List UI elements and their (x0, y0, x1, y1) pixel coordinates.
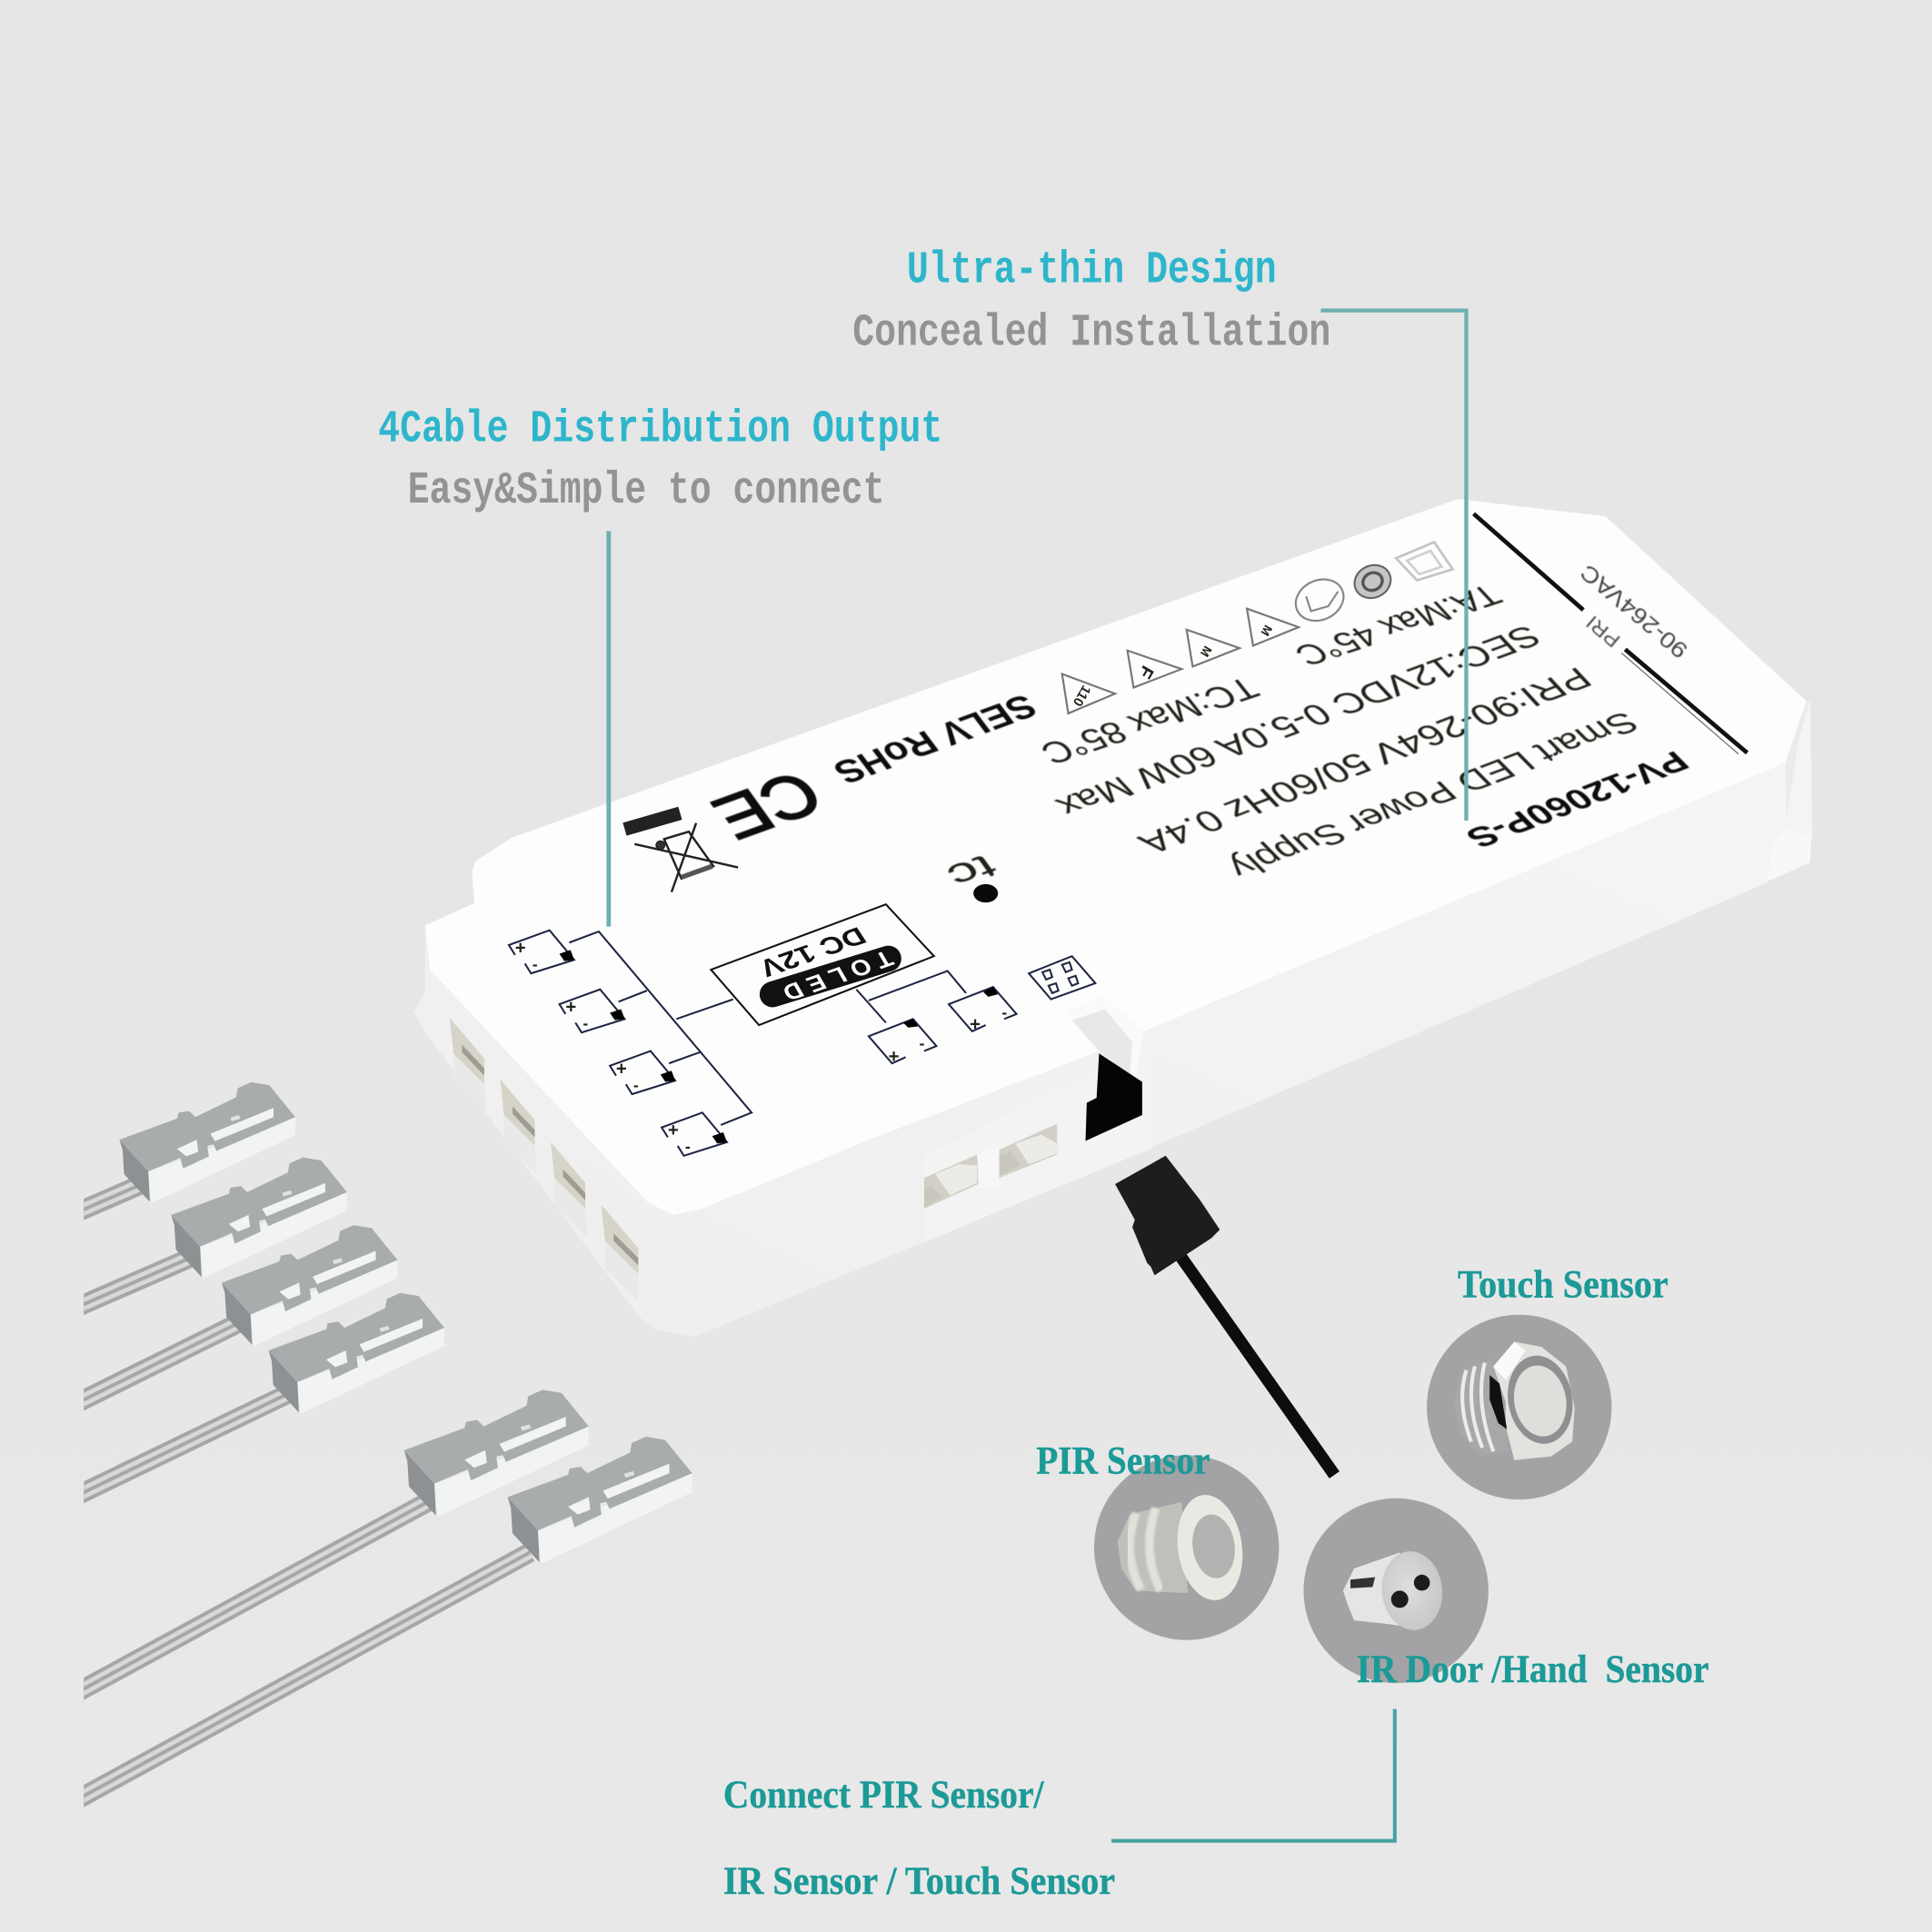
cable 5 (74, 1389, 589, 1694)
product name: Smart LED Power Supply (1220, 705, 1647, 884)
safety symbols: 110 (1070, 682, 1093, 709)
wiring schematic: - (633, 1076, 639, 1094)
wiring schematic: - (919, 1034, 924, 1052)
touch sensor icon (1427, 1315, 1611, 1499)
disposal icon (624, 813, 738, 892)
power supply device (414, 499, 1812, 1337)
ambient temperature: TA:Max 45°C (1287, 578, 1509, 672)
wiring schematic: - (533, 955, 538, 973)
safety symbols: F (1134, 662, 1157, 682)
wiring schematic: + (515, 938, 526, 958)
cable 3 (74, 1225, 397, 1405)
case temperature: TC:Max 85°C (1032, 670, 1266, 770)
pri label: PRI (1581, 611, 1625, 652)
safety symbols: M (1198, 643, 1214, 659)
device top face (425, 499, 1807, 1215)
cable 4 (74, 1293, 444, 1497)
heading: 4Cable Distribution Output (378, 403, 942, 455)
wiring schematic: + (889, 1047, 900, 1067)
device side faces (414, 701, 1812, 1337)
input voltage: 90-264VAC (1576, 559, 1693, 662)
caption: connect sensors: Connect PIR Sensor/ (723, 1773, 1044, 1817)
leader line: ultra-thin (1320, 311, 1466, 821)
secondary rating: SEC:12VDC 0-5.0A 60W Max (1048, 619, 1549, 822)
wiring schematic: - (1001, 1003, 1007, 1021)
end lines (1474, 513, 1748, 754)
safety symbols (1062, 543, 1453, 713)
subheading: Easy&Simple to connect (408, 465, 885, 517)
CE mark: CE (700, 758, 835, 851)
leader line: sensors (1111, 1709, 1395, 1841)
primary rating: PRI:90-264V 50/60Hz 0.4A (1130, 661, 1598, 860)
front sockets (923, 1045, 1152, 1242)
caption: connect sensors: IR Sensor / Touch Sensor (723, 1859, 1115, 1903)
wiring schematic: + (970, 1015, 981, 1035)
leader line: cable output (607, 531, 611, 927)
PIR sensor icon (1094, 1455, 1279, 1640)
safety symbols: M (1258, 622, 1275, 638)
sensor port slot (1064, 996, 1143, 1141)
wiring schematic: + (668, 1120, 679, 1140)
label: PIR sensor: PIR Sensor (1036, 1439, 1210, 1483)
tc dot (973, 884, 998, 902)
wiring schematic: + (565, 998, 576, 1018)
label: touch sensor: Touch Sensor (1458, 1263, 1668, 1307)
caption: connect sensors (723, 1773, 1115, 1903)
certification text: SELV RoHS (826, 687, 1044, 791)
callout: ultra-thin design (852, 244, 1330, 360)
heading: Ultra-thin Design (907, 244, 1277, 296)
wiring schematic (509, 904, 1095, 1156)
side sockets (450, 1018, 638, 1301)
cable 6 (74, 1437, 692, 1801)
dc 12v label: DC 12V (753, 921, 871, 981)
callout: cable output (378, 403, 942, 517)
to led badge: T O L E D (778, 945, 897, 1005)
label: IR sensor: IR Door /Hand Sensor (1357, 1648, 1709, 1691)
wiring schematic: - (583, 1014, 588, 1032)
tc point: tc (940, 847, 1005, 896)
wiring schematic: - (685, 1138, 691, 1156)
led connector cables (74, 1082, 692, 1801)
cable 1 (74, 1082, 295, 1214)
model number: PV-12060P-S (1459, 745, 1697, 854)
product label texts (700, 559, 1697, 896)
wiring schematic: + (616, 1059, 627, 1079)
sensor cable connector (1115, 1156, 1334, 1475)
IR sensor icon (1304, 1499, 1489, 1683)
subheading: Concealed Installation (852, 308, 1330, 360)
cable 2 (74, 1158, 347, 1309)
